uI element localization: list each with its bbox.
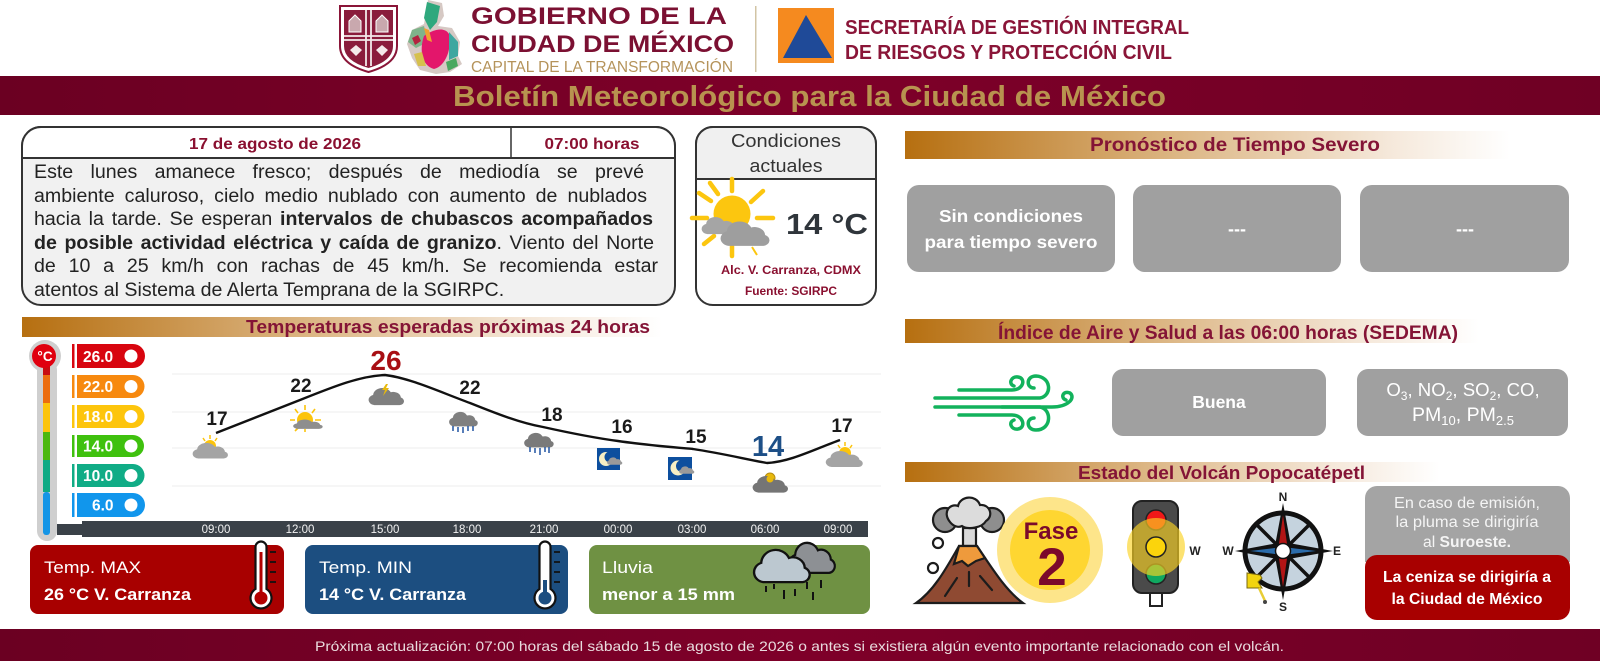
time axis [57, 521, 868, 537]
icon: sun behind clouds [692, 179, 773, 256]
logo: Ciudad de México shield [340, 6, 397, 72]
pill 18.0 [72, 405, 144, 428]
arrow: plume direction southwest [1247, 573, 1267, 604]
icon: 09:00 sun and cloud [826, 442, 863, 467]
icon: rain clouds [754, 543, 835, 600]
text: Secretaría de Gestión Integral [845, 15, 1189, 64]
pill 14.0: 14.0 [83, 438, 113, 456]
panel: severe conditions: para tiempo severo [924, 232, 1098, 252]
text block: bulletin forecast: ambiente caluroso, cielo medio nublado con aumento de nublados [34, 185, 647, 207]
value labels: 26 [370, 345, 402, 376]
panel: pollutants: 10 [1441, 413, 1456, 428]
icon: thermometer red [250, 542, 276, 608]
icon: wind compass: N [1279, 490, 1287, 504]
icon: wind compass: S [1279, 600, 1287, 614]
text: Secretaría de Gestión Integral: DE RIESGOS Y PROTECCIÓN CIVIL [845, 40, 1172, 64]
icon: traffic light [1127, 501, 1201, 606]
panel: severe slot 3: --- [1456, 219, 1474, 239]
pill 22.0: 22.0 [83, 379, 113, 396]
icon: 09:00 sun and cloud [193, 435, 228, 458]
callout: ash warning: La ceniza se dirigiría a [1383, 569, 1551, 586]
pill 10.0 [72, 464, 144, 487]
panel: pollutants: , CO, [1496, 379, 1540, 400]
panel: current conditions [692, 127, 876, 305]
logo: civil protection orange square with blue triangle [755, 6, 834, 72]
callout: ash warning: la Ciudad de México [1392, 591, 1542, 608]
icon: phase 2 badge [997, 497, 1103, 603]
icon: 15:00 storm cloud [369, 384, 404, 405]
panel: air quality rating [1112, 369, 1326, 436]
icon: 18:00 rain cloud [449, 412, 478, 433]
panel: severe conditions: Sin condiciones [939, 206, 1083, 226]
heading: severe weather forecast [905, 131, 1510, 159]
footer band: Próxima actualización: 07:00 horas del sábado 15 de agosto de 2026 o antes si existiera algún evento importante relacionado con el volcán. [315, 638, 1284, 654]
value labels: 22 [459, 378, 481, 399]
panel: pollutants: 2.5 [1496, 413, 1514, 428]
heading: severe weather forecast: Pronóstico de Tiempo Severo [1090, 134, 1380, 156]
pill 26.0 [72, 344, 145, 368]
text block: bulletin forecast: de posible actividad eléctrica y caída de granizo. Viento del Norte [34, 232, 654, 254]
icon: 12:00 sun and cloud [290, 405, 323, 432]
time axis: 18:00 [453, 524, 481, 536]
panel: severe slot 2 [1133, 185, 1341, 272]
pill 14.0 [72, 435, 144, 457]
pill 26.0: 26.0 [83, 349, 113, 366]
value labels: 18 [541, 405, 563, 426]
panel: plume direction and ash: la pluma se dirigiría [1396, 514, 1539, 531]
temperature curve [216, 375, 840, 463]
heading: air quality index: Índice de Aire y Salud a las 06:00 horas (SEDEMA) [998, 321, 1458, 344]
time axis: 00:00 [604, 524, 632, 536]
value labels: 16 [611, 417, 633, 438]
value labels: 17 [831, 416, 853, 437]
thermometer scale [29, 340, 61, 541]
logo: flower emblem [407, 0, 462, 74]
heading: Popocatépetl volcano status: Estado del Volcán Popocatépetl [1078, 462, 1365, 483]
heading: Popocatépetl volcano status [905, 462, 1440, 483]
thermometer scale: °C [37, 349, 53, 364]
icon: wind compass: W [1222, 544, 1234, 558]
text block: bulletin forecast: hacia la tarde. Se esperan intervalos de chubascos acompañados [34, 208, 653, 230]
panel: current conditions: Fuente: SGIRPC [745, 286, 837, 298]
line chart: temperatures next 24 hours [57, 345, 881, 537]
card: rain: Lluvia [602, 558, 654, 577]
panel: air quality rating: Buena [1192, 392, 1246, 412]
panel: current conditions: 14 °C [786, 209, 868, 241]
card: rain [589, 543, 870, 614]
icon: 06:00 cloud and sun [753, 473, 788, 493]
time axis: 03:00 [678, 524, 706, 536]
card: maximum temperature: Temp. MAX [44, 558, 141, 577]
icon: 03:00 moon [668, 457, 694, 480]
pill 6.0 [72, 493, 145, 517]
panel: pollutants: 2 [1490, 389, 1497, 403]
icon: green wind [935, 376, 1072, 430]
text: Gobierno de la Ciudad de México [471, 3, 734, 76]
panel: plume direction and ash: En caso de emisión, [1394, 495, 1540, 512]
icon: phase 2 badge: 2 [1037, 538, 1067, 597]
value labels: 17 [206, 409, 228, 430]
panel: severe conditions [907, 185, 1115, 272]
panel: pollutants: O [1386, 379, 1401, 400]
panel: current conditions: Alc. V. Carranza, CDMX [721, 263, 861, 277]
pill 22.0 [72, 375, 144, 398]
time axis: 06:00 [751, 524, 779, 536]
time axis: 12:00 [286, 524, 314, 536]
text block: bulletin forecast: Este lunes amanece fresco; después de mediodía se prevé [34, 161, 644, 183]
panel: pollutants: PM [1412, 404, 1441, 426]
value labels: 14 [752, 431, 784, 463]
panel: current conditions: Condiciones [731, 131, 841, 151]
panel: pollutants: , SO [1452, 379, 1490, 400]
panel: severe slot 2: --- [1228, 219, 1246, 239]
pill 18.0: 18.0 [83, 409, 113, 426]
icon: wind compass: E [1333, 544, 1341, 558]
card: rain: menor a 15 mm [602, 585, 735, 604]
callout: ash warning [1365, 555, 1570, 620]
panel: plume direction and ash [1365, 486, 1570, 620]
panel: pollutants: , PM [1456, 404, 1496, 426]
heading: expected temperatures [22, 316, 662, 337]
panel: pollutants [1357, 369, 1568, 436]
text: Gobierno de la Ciudad de México: CAPITAL DE LA TRANSFORMACIÓN [471, 59, 733, 76]
legend: temperature pills [72, 344, 145, 517]
panel: bulletin frame [22, 127, 675, 305]
time axis: 09:00 [202, 524, 230, 536]
time axis: 21:00 [530, 524, 558, 536]
pill 10.0: 10.0 [83, 468, 113, 485]
panel: pollutants: 3 [1401, 389, 1408, 403]
panel: pollutants: , NO [1407, 379, 1446, 400]
card: maximum temperature [30, 542, 284, 614]
panel: pollutants: 2 [1446, 389, 1453, 403]
text: Gobierno de la Ciudad de México: CIUDAD DE MÉXICO [471, 30, 734, 58]
panel: bulletin frame: 07:00 horas [544, 136, 640, 153]
panel: plume direction and ash: al Suroeste. [1423, 534, 1511, 551]
panel: bulletin frame: 17 de agosto de 2026 [189, 136, 361, 153]
text: Gobierno de la Ciudad de México: GOBIERNO DE LA [471, 3, 727, 30]
card: minimum temperature: Temp. MIN [319, 558, 412, 577]
time axis: 15:00 [371, 524, 399, 536]
title band: Boletín Meteorológico para la Ciudad de México [453, 81, 1166, 113]
text block: bulletin forecast: atentos al Sistema de Alerta Temprana de la SGIRPC. [34, 279, 504, 301]
footer band [0, 629, 1600, 661]
text: Secretaría de Gestión Integral: SECRETARÍA DE GESTIÓN INTEGRAL [845, 15, 1189, 39]
value labels: 15 [685, 427, 707, 448]
card: minimum temperature [305, 542, 568, 614]
icon: wind compass [1222, 490, 1341, 614]
card: minimum temperature: 14 °C V. Carranza [319, 585, 467, 604]
card: maximum temperature: 26 °C V. Carranza [44, 585, 192, 604]
value labels [206, 345, 853, 463]
panel: severe slot 3 [1360, 185, 1569, 272]
icon: phase 2 badge: Fase [1024, 518, 1078, 545]
heading: expected temperatures: Temperaturas esperadas próximas 24 horas [246, 316, 650, 337]
icon: traffic light: W [1189, 544, 1201, 558]
icon: volcano [916, 498, 1023, 603]
panel: current conditions: actuales [750, 156, 822, 176]
title band [0, 76, 1600, 115]
text block: bulletin forecast: de 10 a 25 km/h con rachas de 45 km/h. Se recomienda estar [34, 255, 658, 277]
pill 6.0: 6.0 [92, 498, 114, 514]
header logos and institution names [340, 0, 1189, 76]
value labels: 22 [290, 376, 312, 397]
text block: bulletin forecast [34, 161, 658, 301]
icon: thermometer blue [535, 542, 560, 608]
time axis: 09:00 [824, 524, 852, 536]
icon: 00:00 moon [597, 448, 622, 470]
icon: 21:00 rain cloud [524, 433, 554, 455]
